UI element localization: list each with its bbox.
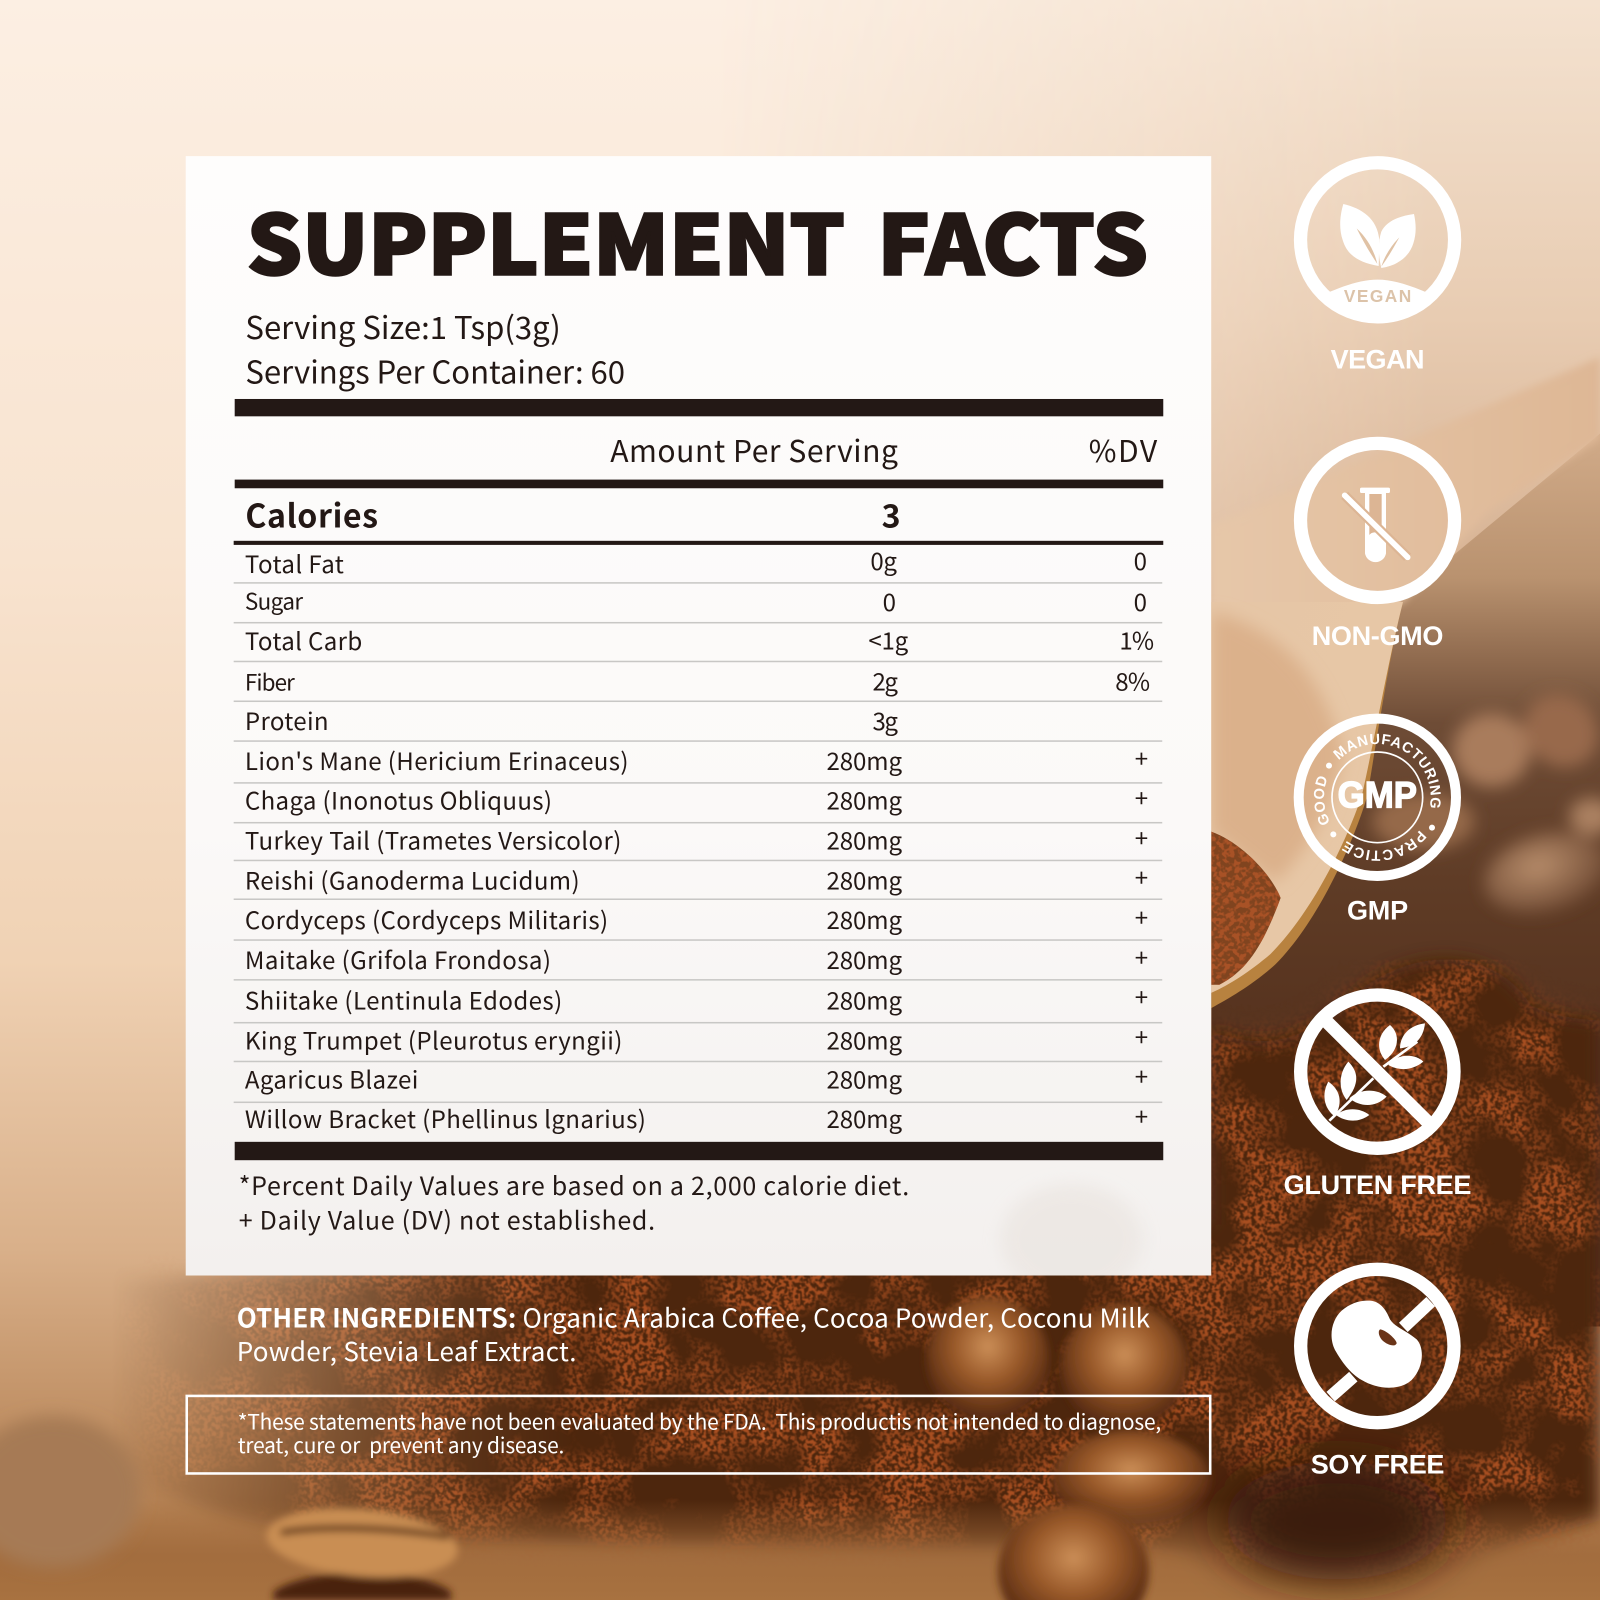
mushroom rows: 280mg [827, 861, 902, 896]
mushroom rows: + [1135, 899, 1148, 934]
nutrient rows: 0 [1134, 542, 1147, 577]
mushroom rows: 280mg [827, 982, 902, 1017]
mushroom rows: 280mg [827, 742, 902, 777]
mushroom rows: Lion's Mane (Hericium Erinaceus) [245, 742, 629, 777]
split coffee bean [264, 1501, 461, 1600]
label: gmp: GMP [1347, 895, 1408, 925]
icon: vegan: VEGAN [1344, 286, 1411, 306]
bottom rule [235, 1142, 1163, 1160]
nutrient rows: Protein [245, 702, 329, 737]
icon: non-gmo [1301, 443, 1455, 597]
column headers: %DV [1089, 427, 1158, 471]
nutrient rows: 3g [872, 702, 898, 737]
mushroom rows: + [1135, 779, 1148, 814]
dark bean on floor [998, 1504, 1149, 1600]
mushroom rows: + [1135, 739, 1148, 774]
column headers: Amount Per Serving [610, 427, 898, 471]
spoon handle [1211, 357, 1600, 653]
footnotes: *Percent Daily Values are based on a 2,000 calorie diet. [239, 1167, 909, 1203]
mushroom rows: King Trumpet (Pleurotus eryngii) [245, 1021, 622, 1056]
mushroom rows: 280mg [827, 901, 902, 936]
nutrient rows: 8% [1115, 662, 1150, 697]
calories row: Calories [245, 492, 378, 538]
dark blurred mound at lower right [1224, 1461, 1449, 1580]
label: non-gmo: NON-GMO [1312, 621, 1443, 651]
nutrient rows: 0 [1134, 583, 1147, 618]
mushroom rows: + [1135, 938, 1148, 973]
nutrient rows: 0g [870, 542, 897, 577]
mushroom rows: 280mg [827, 1021, 902, 1056]
mushroom rows: Reishi (Ganoderma Lucidum) [245, 861, 580, 896]
panel: supplement facts [186, 156, 1211, 1296]
FDA disclaimer box: *These statements have not been evaluated by the FDA. This productis not intended to diagnose, [238, 1407, 1161, 1437]
FDA disclaimer box [187, 1396, 1210, 1473]
header rule [235, 480, 1163, 488]
nutrient rows [245, 542, 1154, 737]
nutrient rows: Sugar [245, 585, 303, 617]
mushroom rows: + [1135, 859, 1148, 894]
icon: soy free [1301, 1269, 1454, 1423]
mushroom rows: Turkey Tail (Trametes Versicolor) [245, 821, 621, 856]
other ingredients: OTHER INGREDIENTS: [237, 1299, 516, 1336]
nutrient rows: Total Carb [245, 622, 362, 657]
nutrient rows: 2g [872, 662, 898, 697]
mushroom rows: Cordyceps (Cordyceps Militaris) [245, 901, 608, 936]
icon: vegan [1296, 163, 1459, 327]
icon: gmp seal [1294, 714, 1461, 881]
mushroom rows: 280mg [827, 1060, 902, 1095]
label: gluten free: GLUTEN FREE [1284, 1170, 1471, 1200]
label: vegan: VEGAN [1331, 344, 1424, 374]
mushroom rows: Maitake (Grifola Frondosa) [245, 941, 551, 976]
nutrient rows: Fiber [245, 665, 295, 697]
other ingredients: Organic Arabica Coffee, Cocoa Powder, Coconu Milk [522, 1299, 1151, 1336]
other ingredients: Powder, Stevia Leaf Extract. [237, 1332, 577, 1369]
foreground blurred beans [927, 1296, 1210, 1529]
spoon bowl [1211, 602, 1403, 1008]
mushroom rows: + [1135, 819, 1148, 854]
other ingredients [237, 1299, 1151, 1369]
mushroom rows: + [1135, 1018, 1148, 1053]
footnotes: + Daily Value (DV) not established. [239, 1202, 655, 1238]
label: soy free: SOY FREE [1311, 1449, 1444, 1479]
nutrient rows: 1% [1119, 621, 1154, 656]
serving info: Serving Size:1 Tsp(3g) [245, 303, 561, 348]
faded bean ghost [1008, 1188, 1135, 1276]
mushroom rows: + [1135, 978, 1148, 1013]
ground coffee mass [102, 960, 1600, 1600]
icon: gmp seal: GOOD [1314, 776, 1329, 825]
icon: gmp seal: PRACTICE [1342, 830, 1426, 861]
nutrient rows: 0 [883, 583, 896, 618]
icon: gmp seal: MANUFACTURING [1332, 734, 1441, 808]
mushroom rows: + [1135, 1058, 1148, 1093]
serving info [245, 303, 625, 393]
nutrient rows: <1g [868, 621, 909, 656]
mushroom rows: 280mg [827, 782, 902, 817]
mushroom rows [245, 739, 1148, 1135]
large blurred bean at lower left [0, 1416, 141, 1567]
mushroom rows: Agaricus Blazei [245, 1060, 418, 1095]
mushroom rows: Chaga (Inonotus Obliquus) [245, 782, 552, 817]
serving info: Servings Per Container: 60 [245, 348, 625, 393]
title: FACTS [878, 179, 1148, 298]
mushroom rows: 280mg [827, 821, 902, 856]
mushroom rows: Willow Bracket (Phellinus lgnarius) [245, 1100, 646, 1135]
nutrient rows: Total Fat [245, 545, 344, 580]
shaded area beneath spoon handle [1211, 434, 1600, 1327]
column headers [610, 427, 1158, 471]
footnotes [239, 1167, 909, 1238]
mushroom rows: 280mg [827, 1100, 902, 1135]
calories row: 3 [882, 492, 901, 538]
title [247, 179, 1148, 298]
title: SUPPLEMENT [247, 179, 845, 298]
mushroom rows: + [1135, 1098, 1148, 1133]
icon: gluten free [1301, 995, 1454, 1148]
calories rule [234, 541, 1163, 545]
FDA disclaimer box: treat, cure or prevent any disease. [238, 1430, 564, 1460]
calories row [245, 492, 901, 538]
mushroom rows: 280mg [827, 941, 902, 976]
top rule [235, 399, 1163, 416]
mushroom rows: Shiitake (Lentinula Edodes) [245, 982, 562, 1017]
upper right blurred beans [1372, 679, 1600, 926]
table row dividers [234, 582, 1162, 1103]
icon: gmp seal: GMP [1338, 773, 1417, 815]
